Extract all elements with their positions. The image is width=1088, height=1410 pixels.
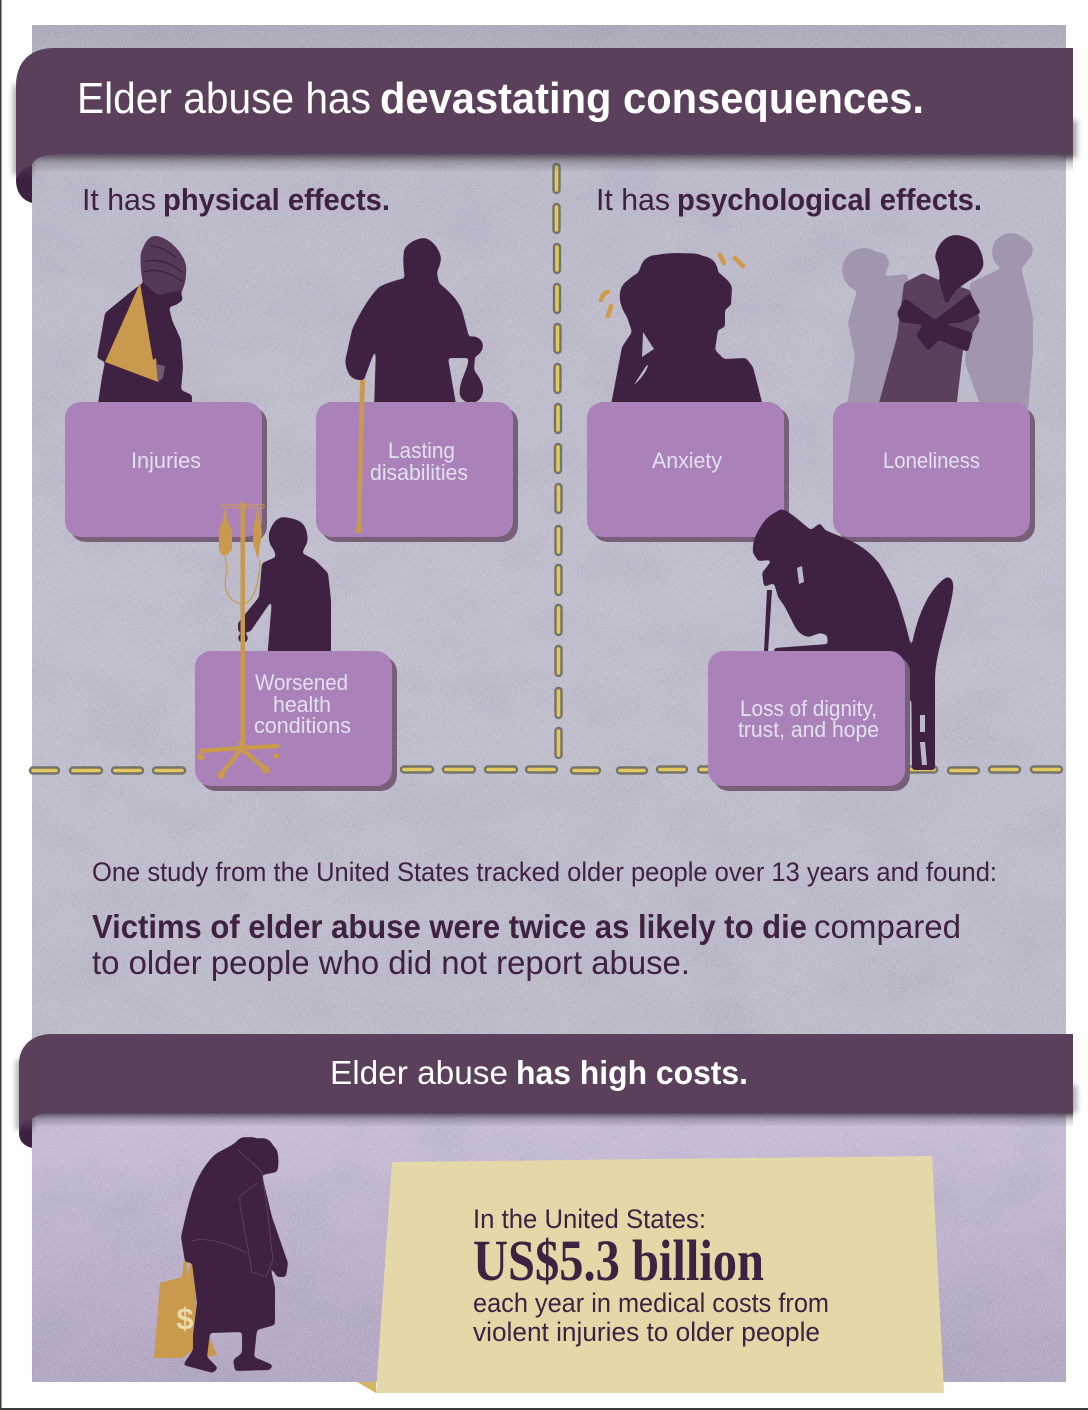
text block: United States study [92,857,997,981]
callout: cost note: each year in medical costs from [473,1288,829,1318]
illustration: woman with cane and handbag [345,238,483,410]
card: Lasting disabilities [316,402,518,542]
text block: United States study: compared [814,908,961,945]
title text: Elder abuse has [77,74,371,123]
card: Loneliness: Loneliness [883,448,980,473]
illustration: patient with IV [238,517,331,660]
callout: cost note [357,1156,944,1393]
card: Loneliness [833,402,1035,542]
vertical stitched divider [554,164,562,758]
card: Worsened health conditions: conditions [254,713,351,738]
card: Injuries: Injuries [131,448,201,473]
heading: physical effects: It has [82,182,156,217]
banner: high costs ribbon [16,1034,1077,1148]
card: Anxiety [587,402,789,542]
icon: worry marks [601,255,743,316]
card: Loss of dignity, trust, and hope: trust, and hope [738,717,879,742]
illustration: lonely woman with shadow figures [842,233,1033,410]
illustration: woman with arm sling [97,236,192,410]
banner text: has high costs. [516,1054,748,1091]
banner text [330,1054,748,1091]
callout: cost note: violent injuries to older people [473,1317,820,1347]
text block: United States study: Victims of elder abuse were twice as likely to die [92,908,807,945]
heading: physical effects: physical effects. [163,182,390,217]
illustration: woman carrying money bag: $ [176,1301,194,1336]
callout: cost note: In the United States: [473,1204,706,1234]
card: Loss of dignity, trust, and hope: Loss of dignity, [740,696,877,721]
banner text: Elder abuse [330,1054,508,1091]
card: Worsened health conditions [195,651,397,791]
illustration: woman with curly hair, anxiety [601,253,764,410]
card: Worsened health conditions: Worsened [255,670,348,695]
icon: walking cane [355,380,365,533]
title text [77,74,924,123]
callout: cost note: US$5.3 billion [473,1228,764,1293]
text block: United States study: to older people who did not report abuse. [92,944,690,981]
card: Lasting disabilities: Lasting [388,438,455,463]
text block: United States study: One study from the United States tracked older people over 13 years and found: [92,857,997,887]
card: Loss of dignity, trust, and hope [708,651,910,791]
card: Anxiety: Anxiety [652,448,722,473]
heading: psychological effects: It has [596,182,670,217]
horizontal stitched divider [30,766,1062,774]
icon: IV stand [198,502,279,779]
illustration: hunched seated figure on chair [753,509,953,770]
card: Injuries [65,402,267,542]
heading: psychological effects: psychological effects. [677,182,982,217]
title text: devastating consequences. [380,74,924,123]
card: Lasting disabilities: disabilities [370,460,468,485]
illustration: woman carrying money bag [154,1137,288,1373]
banner: title ribbon [13,48,1077,203]
card: Worsened health conditions: health [273,692,331,717]
